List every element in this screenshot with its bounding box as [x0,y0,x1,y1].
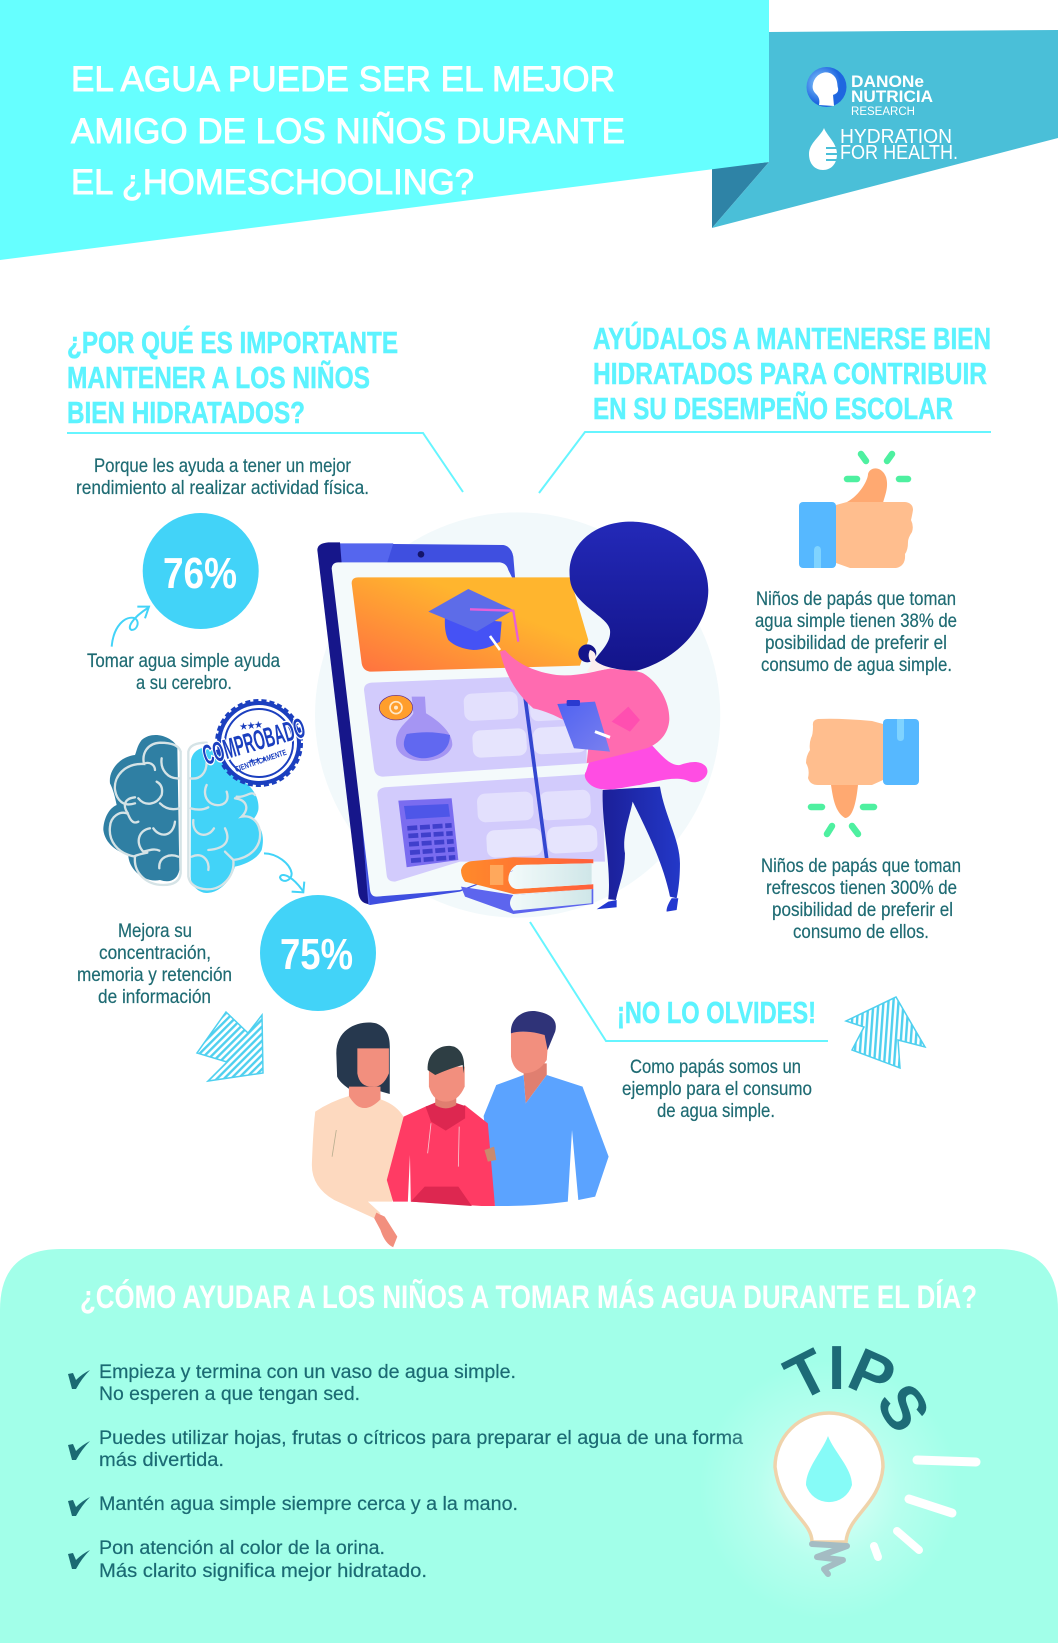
icon: thumbs up [799,454,913,568]
badge: comprobado stamp: CIENTÍFICAMENTE [234,748,288,774]
text: soda parents [761,855,961,943]
heading: why it matters: ¿POR QUÉ ES IMPORTANTE [67,325,398,360]
title: EL ¿HOMESCHOOLING? [71,163,474,202]
title: TIPS: P [839,1335,905,1415]
text: simple-water parents: posibilidad de preferir el [765,632,947,654]
person: father [484,1011,609,1206]
icon: tips lightbulb [699,1360,976,1620]
text: parents are an example: Como papás somos un [630,1056,801,1078]
text: brain benefit: Tomar agua simple ayuda [87,650,280,672]
title: AMIGO DE LOS NIÑOS DURANTE [71,112,625,151]
arrow: curly from brain to 75% [264,853,304,892]
panel: header banner [0,0,1058,260]
icon: books [461,857,593,914]
text: simple-water parents: Niños de papás que toman [756,588,956,610]
text: parents are an example: de agua simple. [657,1100,775,1122]
heading: help them: EN SU DESEMPEÑO ESCOLAR [593,391,953,426]
tip: water at hand: Mantén agua simple siempre cerca y a la mano. [99,1494,518,1515]
icon: brain [103,735,263,893]
text: concentration benefit: memoria y retención [77,964,232,986]
logo: Danone Nutricia Research: NUTRICIA [851,88,933,106]
illustration: family [312,1011,609,1247]
person: mother [312,1023,404,1247]
tip: urine colour: Pon atención al color de la orina. [99,1538,385,1559]
illustration: tablet and student [315,512,720,918]
tip: leaves and fruit: Puedes utilizar hojas, frutas o cítricos para preparar el agua de una forma [99,1428,743,1449]
stat: 75%: 75% [280,930,353,979]
stat: 75% [260,895,376,1011]
text: physical activity [76,455,369,499]
person: child [387,1046,496,1206]
text: concentration benefit: de información [98,986,211,1008]
icon: graduation cap [428,589,518,650]
logo: Hydration for Health [809,126,958,170]
text: simple-water parents: agua simple tienen 38% de [755,610,957,632]
tip: start and end with water: Empieza y termina con un vaso de agua simple. [99,1362,516,1383]
text: parents are an example [622,1056,812,1122]
tip: urine colour [68,1538,427,1582]
logo: Hydration for Health: FOR HEALTH. [840,142,958,164]
tip: start and end with water [68,1362,516,1405]
text: physical activity: Porque les ayuda a tener un mejor [94,455,351,477]
text: concentration benefit: concentración, [99,942,211,964]
panel: maths card [377,773,605,882]
panel: orange course card [352,577,588,672]
arrow: curly to 76% [112,607,149,647]
text: brain benefit: a su cerebro. [136,672,232,694]
text: parents are an example: ejemplo para el consumo [622,1078,812,1100]
title: EL AGUA PUEDE SER EL MEJOR [71,60,615,99]
tip: start and end with water: No esperen a que tengan sed. [99,1384,360,1405]
title: TIPS [775,1334,943,1444]
tablet [317,542,547,905]
stat: 76%: 76% [163,549,237,598]
heading: why it matters [67,325,398,430]
title [71,60,625,202]
tip: leaves and fruit [68,1428,743,1471]
title: TIPS: S [862,1372,943,1444]
text: soda parents: consumo de ellos. [793,921,929,943]
title: TIPS: T [775,1336,840,1415]
icon: striped arrow left [197,1012,263,1081]
tip: urine colour: Más clarito significa mejor hidratado. [99,1561,427,1582]
text: concentration benefit [77,920,232,1008]
panel: tips [0,1249,1058,1643]
logo: Danone Nutricia Research: RESEARCH [851,106,915,118]
icon: thumbs down [806,719,919,834]
badge: comprobado stamp [199,701,309,785]
heading: no lo olvides: ¡NO LO OLVIDES! [617,995,816,1030]
text: brain benefit [87,650,280,694]
logo: Danone Nutricia Research: DANONe [851,73,924,91]
text: soda parents: posibilidad de preferir el [772,899,953,921]
text: physical activity: rendimiento al realizar actividad física. [76,477,369,499]
icon: striped arrow right [846,997,925,1068]
heading: why it matters: BIEN HIDRATADOS? [67,395,305,430]
stat: 76% [143,513,259,629]
text: simple-water parents [755,588,957,676]
panel: science card [364,677,587,777]
text: concentration benefit: Mejora su [118,920,192,942]
badge: comprobado stamp: ★★★ [239,720,264,733]
logo: Danone Nutricia Research [806,67,933,118]
character: student [490,522,708,912]
badge: comprobado stamp: COMPROBADO [199,712,309,771]
heading: help them [593,320,991,426]
logo: Hydration for Health: HYDRATION [840,126,952,148]
icon: calculator [398,798,458,867]
text: soda parents: refrescos tienen 300% de [766,877,957,899]
tip: leaves and fruit: más divertida. [99,1450,224,1471]
title: TIPS: I [828,1334,845,1403]
icon: flask [379,695,452,761]
text: simple-water parents: consumo de agua simple. [761,654,952,676]
heading: why it matters: MANTENER A LOS NIÑOS [67,360,370,395]
text: soda parents: Niños de papás que toman [761,855,961,877]
badge: comprobado stamp: ★★★ [248,754,268,766]
